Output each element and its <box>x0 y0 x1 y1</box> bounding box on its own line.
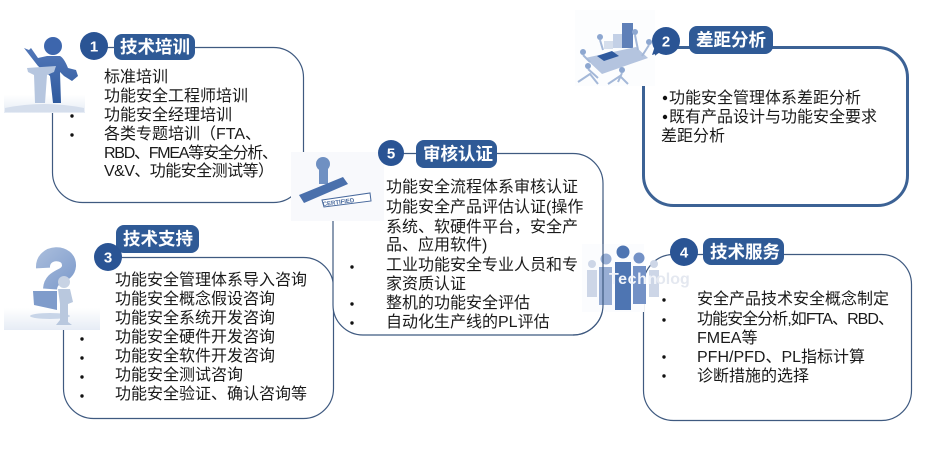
text block 5: 家资质认证 <box>386 275 466 293</box>
bullets <box>662 298 666 378</box>
text block 5: 功能安全产品评估认证(操作 <box>386 198 583 216</box>
text block 1: 各类专题培训（FTA、 <box>104 125 261 143</box>
text block 1: 标准培训 <box>104 68 168 86</box>
text block 2: 差距分析 <box>661 127 725 145</box>
number badge 2 <box>652 27 680 55</box>
number badge 3: 3 <box>104 250 112 266</box>
text block 5: 品、应用软件) <box>386 235 487 254</box>
text block 3: 功能安全系统开发咨询 <box>115 309 275 327</box>
text block 4: 功能安全分析,如FTA、RBD、 <box>697 310 894 328</box>
heading: 技术支持: 技术支持 <box>123 229 193 249</box>
text block 1: V&V、功能安全测试等） <box>104 162 274 180</box>
text block 4: PFH/PFD、PL指标计算 <box>697 347 865 366</box>
heading: 审核认证 <box>416 140 497 168</box>
text block 4 <box>697 289 894 385</box>
bullets <box>80 337 84 398</box>
text block 4: 安全产品技术安全概念制定 <box>697 289 889 308</box>
text block 4: FMEA等 <box>697 329 757 347</box>
text block 3: 功能安全概念假设咨询 <box>115 289 275 308</box>
text block 1: 功能安全经理培训 <box>104 106 232 124</box>
panel 3: 技术支持 <box>4 225 334 418</box>
text block 1: 功能安全工程师培训 <box>104 87 248 105</box>
heading: 差距分析 <box>689 26 773 54</box>
text block 5: 系统、软硬件平台，安全产 <box>386 218 578 236</box>
text block 5 <box>386 178 583 331</box>
heading: 差距分析: 差距分析 <box>696 30 766 50</box>
text block 2: 既有产品设计与功能安全要求 <box>669 108 877 126</box>
number badge 4 <box>670 238 698 266</box>
text block 5: 工业功能安全专业人员和专 <box>386 256 578 274</box>
heading: 技术服务: 技术服务 <box>710 242 780 262</box>
heading: 审核认证: 审核认证 <box>423 144 493 164</box>
number badge 1 <box>80 32 108 60</box>
text block 5: 自动化生产线的PL评估 <box>386 313 550 331</box>
heading: 技术培训 <box>114 34 195 60</box>
text block 2: 功能安全管理体系差距分析 <box>669 89 861 107</box>
text block 1 <box>104 68 278 180</box>
number badge 1: 1 <box>90 38 98 56</box>
icon: speaker at podium <box>4 37 85 113</box>
bullets <box>70 114 74 137</box>
text block 1: RBD、FMEA等安全分析、 <box>104 144 278 162</box>
number badge 2: 2 <box>662 34 670 50</box>
text block 5: 功能安全流程体系审核认证 <box>386 178 578 196</box>
text block 3: 功能安全测试咨询 <box>115 366 243 384</box>
number badge 3 <box>94 243 122 271</box>
number badge 5 <box>378 140 404 166</box>
heading: 技术培训: 技术培训 <box>120 37 190 57</box>
text block 4: 诊断措施的选择 <box>697 367 809 385</box>
panel 5: 审核认证 <box>291 140 603 335</box>
text block 3 <box>115 271 307 403</box>
text block 3: 功能安全管理体系导入咨询 <box>115 271 307 289</box>
number badge 4: 4 <box>680 244 689 262</box>
panel 2: 差距分析 <box>575 10 908 206</box>
heading: 技术支持 <box>116 225 199 253</box>
icon: question mark figure <box>4 242 100 330</box>
text block 3: 功能安全验证、确认咨询等 <box>115 385 307 403</box>
icon: technology people: Techn <box>609 271 658 288</box>
icon: technology people: olog <box>656 271 690 288</box>
icon: certified stamp <box>291 152 384 221</box>
text block 3: 功能安全软件开发咨询 <box>115 347 275 365</box>
panel 1: 技术培训 <box>4 32 304 202</box>
bullets <box>350 265 354 325</box>
panel 4: 技术服务 <box>582 238 912 420</box>
number badge 5: 5 <box>387 146 395 162</box>
text block 5: 整机的功能安全评估 <box>386 294 530 312</box>
icon: meeting team <box>575 10 655 86</box>
icon: certified stamp: CERTIFIED <box>323 198 355 208</box>
text block 2 <box>661 89 877 145</box>
text block 3: 功能安全硬件开发咨询 <box>115 328 275 346</box>
heading: 技术服务 <box>703 238 784 265</box>
icon: technology people <box>582 244 690 312</box>
